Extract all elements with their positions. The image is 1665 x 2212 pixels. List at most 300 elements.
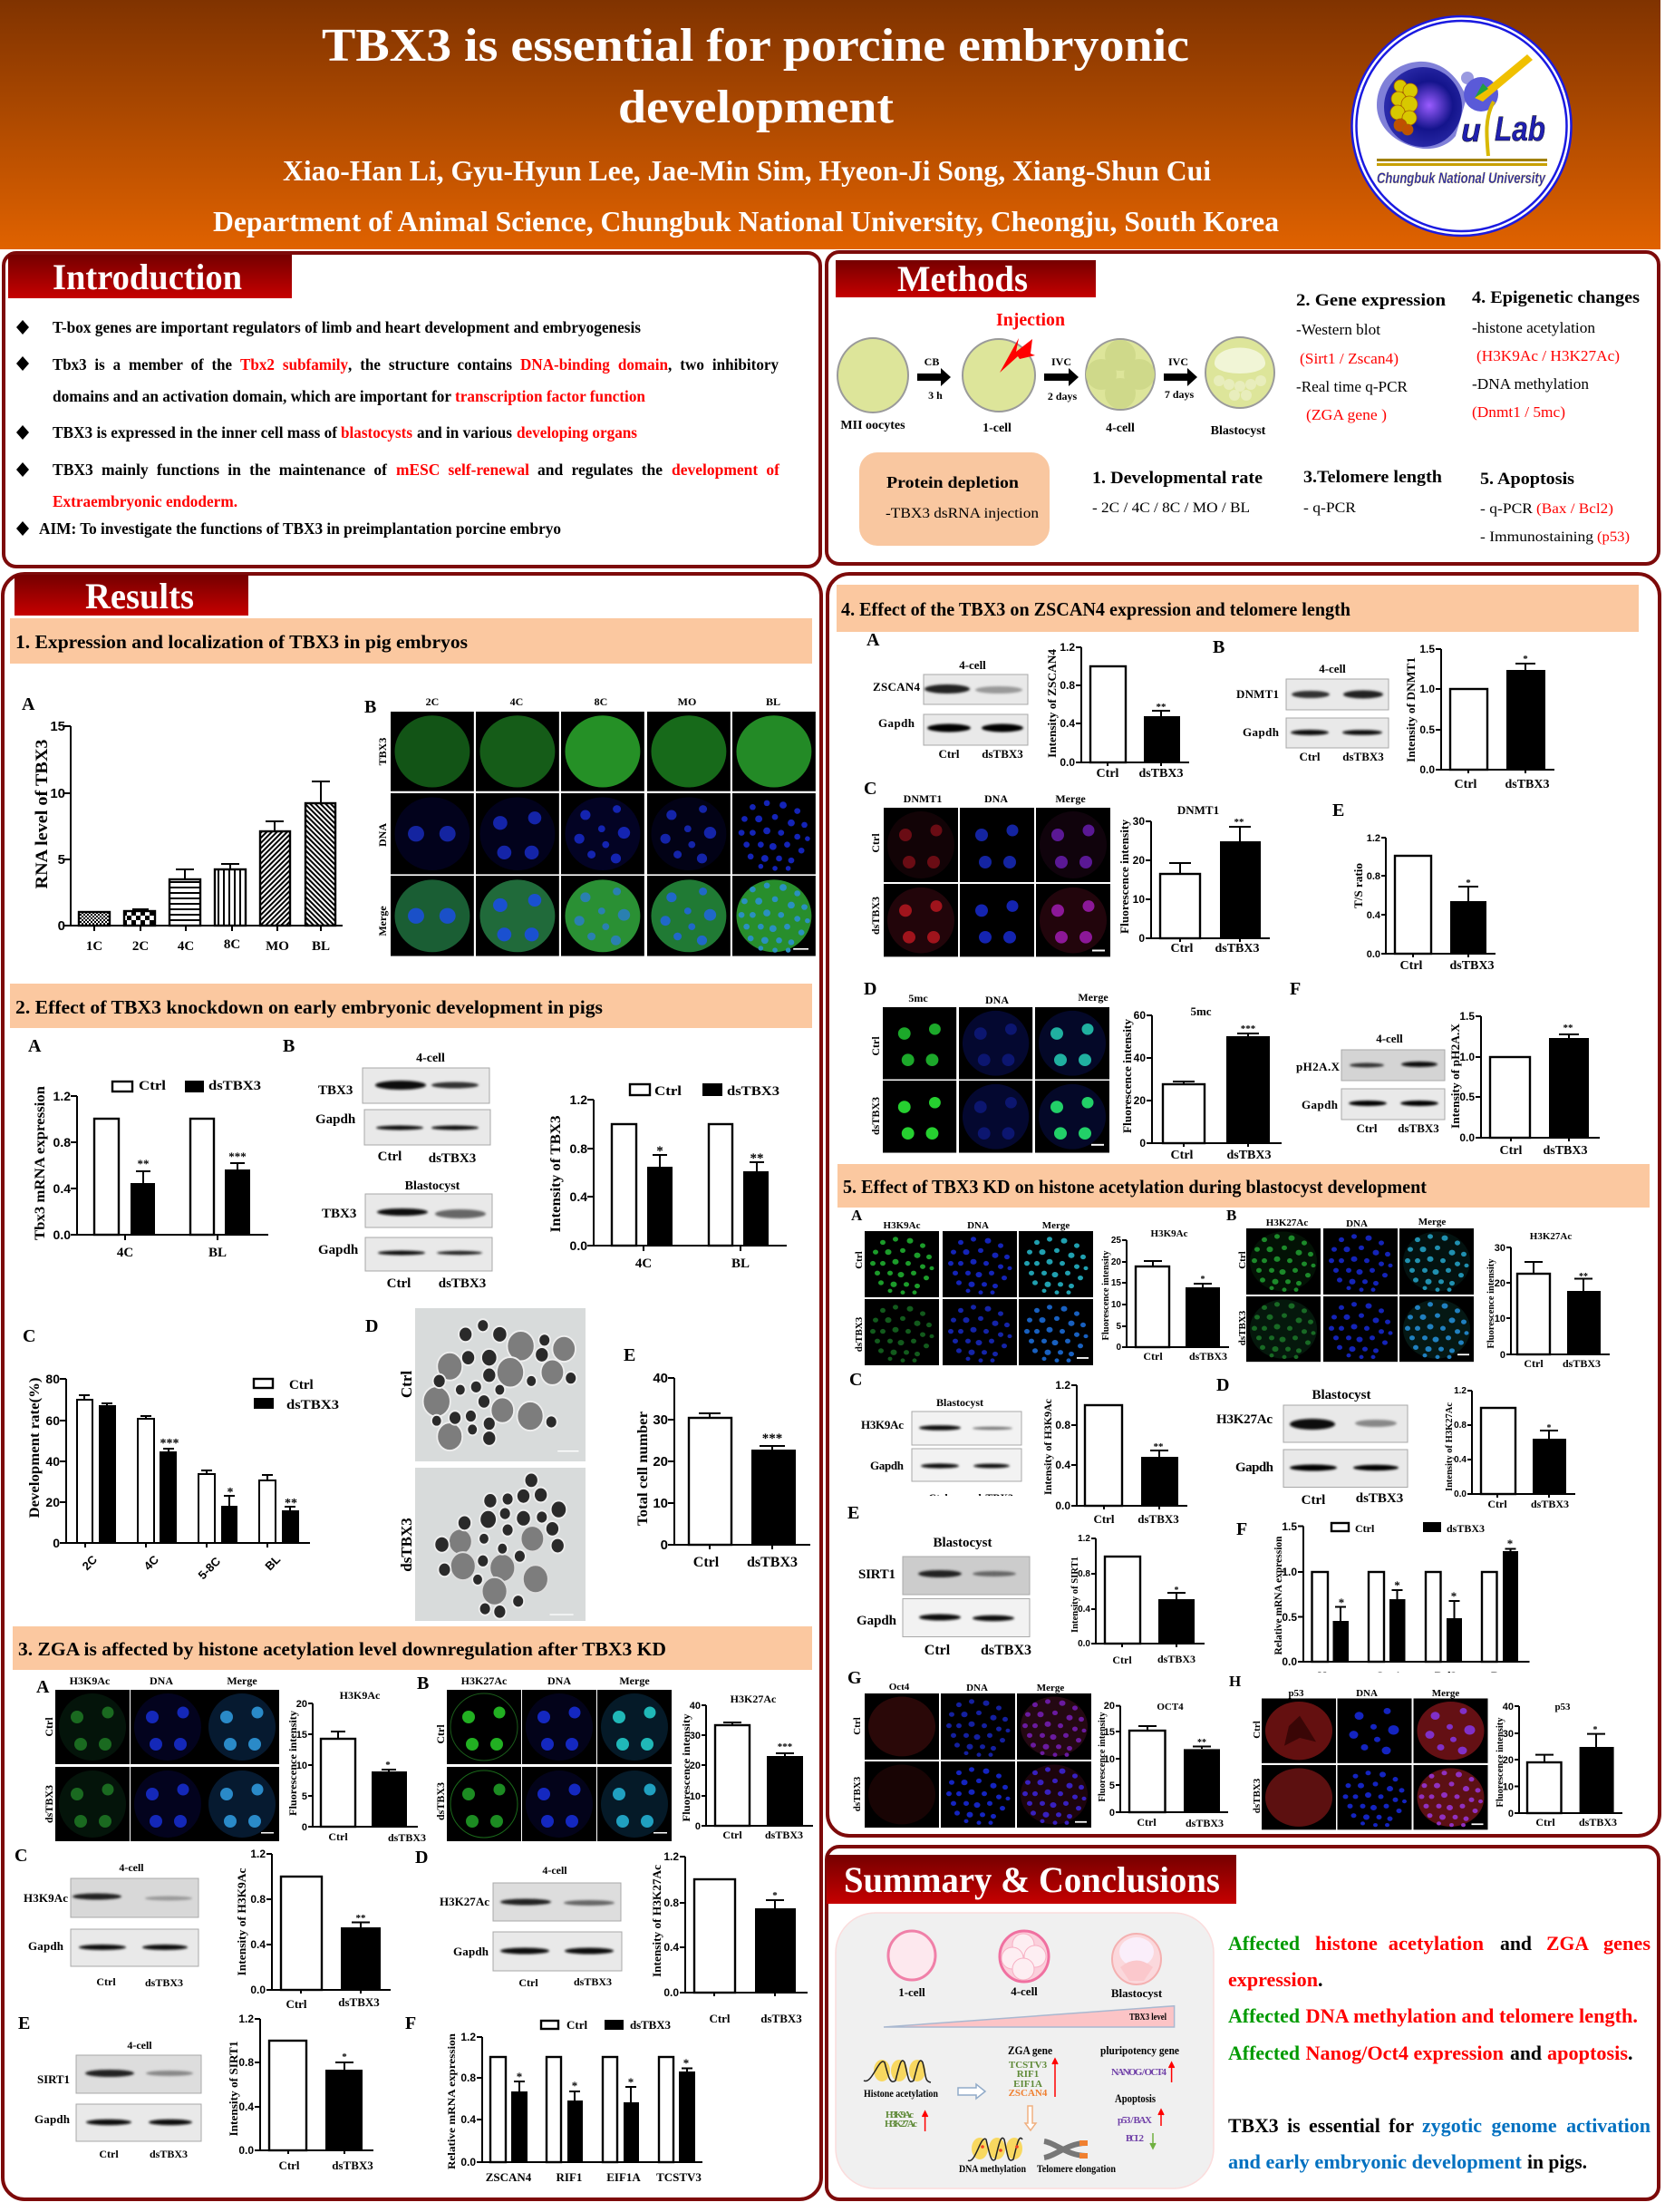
- bar chart 5B: 10: [1495, 1314, 1505, 1324]
- bar chart 4B: 0.5: [1419, 723, 1435, 736]
- bar chart 2C: development rate: BL: [262, 1552, 283, 1573]
- embryo culture diagram: Blastocyst: [1211, 424, 1266, 438]
- bar chart 2A: Tbx3 mRNA expression: A: [28, 1036, 42, 1056]
- bar chart 4C: DNMT1 fluorescence: 10: [1133, 893, 1145, 906]
- icon: DNA methylation nucleosomes: [968, 2138, 1022, 2161]
- micrograph panel 3B: H3K27Ac: H3K27Ac: [461, 1674, 508, 1687]
- text block: gene expression: (Sirt1 / Zscan4): [1300, 350, 1399, 367]
- text: histone acetylation: Histone acetylation: [864, 2087, 938, 2100]
- western blots 2B: Gapdh: [318, 1243, 359, 1257]
- western blot 5E: [847, 1503, 1031, 1658]
- bar chart 4F: 0.0: [1459, 1131, 1475, 1144]
- bar chart 3F: relative mRNA expression: Relative mRNA expression: [445, 2033, 458, 2169]
- micrograph panel 5G: Oct4: G: [847, 1668, 862, 1688]
- micrograph panel 4C: DNMT1: Ctrl: [869, 833, 882, 853]
- western blot 5D: dsTBX3: [1356, 1491, 1403, 1506]
- micrograph panel 4D: 5mc: DNA: [985, 994, 1009, 1006]
- micrograph grid 1B: TBX3 localisation: [364, 695, 816, 956]
- micrograph panel 3B: H3K27Ac: dsTBX3: [434, 1782, 447, 1820]
- bar chart 2A: Tbx3 mRNA expression: [28, 1036, 268, 1260]
- bar chart 3D: [650, 1850, 808, 2025]
- bullet list: development of: [672, 461, 780, 479]
- bar chart 2E: total cell number: 20: [653, 1454, 668, 1470]
- labels: DNA methylation and telomere: Telomere elongation: [1037, 2162, 1116, 2175]
- western blot 4F: 4-cell: [1376, 1032, 1403, 1045]
- bar chart 5D: Ctrl: [1487, 1498, 1507, 1510]
- micrograph panel 3A: H3K9Ac: DNA: [150, 1674, 173, 1687]
- bar chart 3F: relative mRNA expression: EIF1A: [606, 2170, 641, 2184]
- bar chart 3F: relative mRNA expression: dsTBX3: [630, 2018, 671, 2032]
- bar chart 2B: Intensity of TBX3: dsTBX3: [727, 1084, 779, 1099]
- bar chart 3D: dsTBX3: [760, 2012, 802, 2025]
- micrograph panel 4C: DNMT1: Merge: [1055, 792, 1086, 805]
- western blot 4A: Gapdh: [878, 716, 915, 730]
- bar chart 4F: [1448, 1010, 1600, 1158]
- bar chart 2C: development rate: 2C: [80, 1552, 100, 1573]
- embryo culture diagram: IVC: [1051, 355, 1071, 368]
- bar chart 2A: Tbx3 mRNA expression: Ctrl: [139, 1079, 166, 1093]
- bar chart 2B: Intensity of TBX3: 4C: [635, 1256, 652, 1271]
- bar chart 1A: RNA level of TBX3: [22, 694, 343, 954]
- bullet list: developing organs: [517, 423, 637, 441]
- micrograph panel 5H: p53: DNA: [1356, 1688, 1378, 1699]
- bar chart 5G: OCT4: Ctrl: [1137, 1816, 1157, 1829]
- bar chart 1A: RNA level of TBX3: A: [22, 694, 35, 714]
- bar chart 2C: development rate: 80: [45, 1372, 60, 1386]
- embryo photographs 2D: dsTBX3: [398, 1518, 415, 1572]
- bar chart 3C: 1.2: [250, 1848, 266, 1860]
- western blots 2B: 4-cell: [416, 1052, 445, 1065]
- western blots 2B: [283, 1036, 492, 1291]
- bar chart 3D: 1.2: [663, 1850, 679, 1863]
- western blot 3D: Gapdh: [453, 1945, 489, 1958]
- bar chart 4C: DNMT1 fluorescence: **: [1234, 817, 1244, 828]
- micrograph grid 1B: TBX3 localisation: B: [364, 697, 376, 717]
- western blot 5E: E: [847, 1503, 859, 1523]
- bar chart 2E: total cell number: 0: [661, 1538, 668, 1553]
- icon: telomere: [1044, 2140, 1088, 2159]
- bar chart 5B: 20: [1495, 1278, 1505, 1289]
- bar chart 1A: RNA level of TBX3: 4C: [178, 939, 194, 954]
- micrograph panel 5A: H3K9Ac: A: [851, 1207, 863, 1224]
- bar chart 5C: Ctrl: [1093, 1512, 1115, 1526]
- bar chart 5B: 30: [1495, 1243, 1505, 1254]
- bar chart 2C: development rate: 4C: [141, 1552, 161, 1573]
- bar chart 5F: relative mRNA expression: *: [1451, 1589, 1457, 1603]
- bar chart 4E: T/S ratio: 0.8: [1367, 871, 1380, 882]
- bar chart 5B: 0: [1500, 1350, 1505, 1361]
- title: [322, 20, 1189, 133]
- western blot 4F: Gapdh: [1302, 1098, 1339, 1111]
- bar chart 4E: T/S ratio: dsTBX3: [1449, 959, 1495, 973]
- western blot 4F: [1290, 979, 1445, 1135]
- western blot 5C: Gapdh: [870, 1459, 905, 1472]
- bar chart 5F: relative mRNA expression: Bax: [1491, 1669, 1511, 1683]
- western blots 2B: dsTBX3: [439, 1276, 486, 1291]
- bar chart 4D: 5mc fluorescence: [1120, 1004, 1282, 1162]
- western blot 4B: Ctrl: [1299, 750, 1321, 763]
- bar chart 5B: H3K27Ac: [1530, 1231, 1572, 1242]
- bar chart 4B: [1404, 643, 1554, 791]
- bar chart 4D: 5mc fluorescence: 0: [1139, 1137, 1146, 1150]
- embryo culture diagram: [837, 337, 1274, 438]
- ZGA gene list: RIF1: [1017, 2069, 1039, 2080]
- conclusions text: DNA methylation and telomere length.: [1305, 2004, 1638, 2027]
- micrograph panel 5B: H3K27Ac: Merge: [1418, 1217, 1446, 1227]
- bullet list: Extraembryonic endoderm.: [53, 492, 237, 510]
- bar chart 4E: T/S ratio: *: [1466, 878, 1471, 888]
- bar chart 1A: RNA level of TBX3: 0: [58, 918, 65, 934]
- bar chart 2C: development rate: ***: [160, 1437, 179, 1450]
- section heading 2: [10, 984, 812, 1028]
- micrograph panel 5B: H3K27Ac: dsTBX3: [1237, 1310, 1248, 1345]
- text: histone marks: [885, 2110, 917, 2130]
- apoptosis block: BCL2: [1126, 2133, 1144, 2144]
- western blots 2B: B: [283, 1036, 295, 1056]
- bar chart 4D: 5mc fluorescence: Ctrl: [1171, 1149, 1194, 1162]
- micrograph panel 5B: H3K27Ac: DNA: [1346, 1218, 1368, 1229]
- text block: apoptosis: [1480, 470, 1630, 545]
- micrograph panel 4C: DNMT1: DNA: [984, 792, 1008, 805]
- bar chart 5F: relative mRNA expression: [1236, 1519, 1532, 1683]
- western blot 4B: B: [1213, 637, 1225, 657]
- heading: Summary & Conclusions: Summary & Conclusions: [844, 1859, 1220, 1900]
- bar chart 4E: T/S ratio: Ctrl: [1400, 959, 1423, 973]
- western blot 5D: [1216, 1375, 1408, 1508]
- bar chart 4B: dsTBX3: [1505, 778, 1550, 791]
- bar chart 2E: total cell number: Total cell number: [635, 1412, 651, 1526]
- micrograph panel 5A: H3K9Ac: [851, 1207, 1093, 1365]
- callout: protein depletion: -TBX3 dsRNA injection: [886, 506, 1039, 521]
- micrograph panel 5G: Oct4: Oct4: [889, 1682, 910, 1693]
- bar chart 3D: *: [772, 1890, 778, 1901]
- western blots 2B: dsTBX3: [429, 1151, 476, 1166]
- bar chart 5A: *: [1200, 1275, 1205, 1285]
- bar chart 4A: **: [1157, 702, 1166, 713]
- bar chart 5H: p53: Fluorescence intensity: [1495, 1717, 1505, 1808]
- conclusions text: Nanog/Oct4 expression: [1305, 2042, 1504, 2064]
- icon: 4-cell embryo: [1000, 1931, 1049, 1982]
- western blot 4B: [1213, 637, 1389, 763]
- bar chart 3B: H3K27Ac fluorescence: 40: [690, 1701, 701, 1712]
- micrograph panel 5A: H3K9Ac: DNA: [967, 1220, 989, 1231]
- apoptosis block: [1115, 2091, 1164, 2149]
- micrograph panel 4D: 5mc: 5mc: [908, 992, 928, 1004]
- micrograph panel 3A: H3K9Ac: dsTBX3: [43, 1785, 55, 1823]
- bar chart 2C: development rate: 5-8C: [196, 1554, 224, 1582]
- bar chart 3B: H3K27Ac fluorescence: H3K27Ac: [731, 1693, 777, 1705]
- bar chart 5C: **: [1153, 1441, 1164, 1452]
- bar chart 5F: relative mRNA expression: F: [1236, 1519, 1247, 1539]
- bar chart 2E: total cell number: dsTBX3: [747, 1555, 798, 1570]
- bar chart 1A: RNA level of TBX3: 15: [50, 719, 65, 734]
- micrograph grid 1B: TBX3 localisation: Merge: [376, 906, 389, 936]
- western blot 3C: Ctrl: [96, 1975, 116, 1988]
- bar chart 5F: relative mRNA expression: *: [1507, 1537, 1513, 1550]
- bullet list: mESC self-renewal: [396, 461, 529, 479]
- western blot 3C: Gapdh: [28, 1939, 64, 1953]
- western blot 3E: Gapdh: [34, 2112, 71, 2126]
- bar chart 5H: p53: 20: [1503, 1755, 1514, 1766]
- text block: epigenetic changes: -histone acetylation: [1472, 319, 1596, 336]
- bar chart 5G: OCT4: **: [1197, 1738, 1206, 1748]
- header banner: [0, 0, 1660, 249]
- section heading 3: 3. ZGA is affected by histone acetylation level downregulation after TBX3 KD: [18, 1638, 666, 1660]
- conclusions text: Affected: [1228, 1932, 1300, 1955]
- micrograph panel 3B: H3K27Ac: Ctrl: [434, 1724, 447, 1744]
- conclusions text: histone acetylation: [1315, 1932, 1484, 1955]
- bar chart 5D: 0.4: [1454, 1455, 1467, 1465]
- bar chart 2A: Tbx3 mRNA expression: Tbx3 mRNA expression: [33, 1086, 48, 1240]
- embryo photographs 2D: [365, 1308, 586, 1621]
- bar chart 5D: dsTBX3: [1531, 1498, 1569, 1510]
- text block: gene expression: -Real time q-PCR: [1296, 378, 1408, 395]
- bar chart 3C: [235, 1848, 391, 2011]
- bar chart 2C: development rate: 60: [45, 1413, 60, 1428]
- bar chart 5F: relative mRNA expression: 1.5: [1282, 1520, 1297, 1533]
- western blot 3C: [15, 1846, 198, 1989]
- bar chart 5A: dsTBX3: [1189, 1350, 1227, 1363]
- bar chart 3F: relative mRNA expression: 0.4: [460, 2113, 476, 2126]
- bar chart 3E: Intensity of SIRT1: [227, 2042, 240, 2136]
- bar chart 3E: 0.0: [238, 2144, 254, 2157]
- bar chart 5B: dsTBX3: [1563, 1357, 1601, 1370]
- bar chart 4A: 0.8: [1060, 679, 1075, 692]
- micrograph grid 1B: TBX3 localisation: BL: [766, 695, 780, 708]
- text block: gene expression: [1296, 291, 1446, 423]
- western blot 3E: Ctrl: [99, 2148, 119, 2160]
- bar chart 3B: H3K27Ac fluorescence: 30: [690, 1731, 701, 1741]
- text block: gene expression: (ZGA gene ): [1306, 406, 1387, 423]
- icon: Cui Lab logo: [1352, 16, 1572, 236]
- micrograph panel 5G: Oct4: [847, 1668, 1091, 1828]
- bar chart 2A: Tbx3 mRNA expression: 0.4: [53, 1181, 71, 1196]
- western blot 5D: Ctrl: [1302, 1493, 1325, 1508]
- bar chart 5A: 15: [1111, 1278, 1121, 1288]
- ZGA gene list: EIF1A: [1013, 2079, 1042, 2090]
- embryo culture diagram: 1-cell: [983, 422, 1012, 435]
- bar chart 2C: development rate: 20: [45, 1495, 60, 1509]
- micrograph panel 5B: H3K27Ac: B: [1226, 1207, 1236, 1224]
- panel: results left: [3, 574, 821, 2199]
- bar chart 5A: 10: [1111, 1300, 1121, 1310]
- panel: summary and conclusions: [827, 1847, 1659, 2199]
- ZGA gene list: [1008, 2043, 1058, 2099]
- western blot 5D: Blastocyst: [1312, 1388, 1370, 1402]
- text block: epigenetic changes: 4. Epigenetic changes: [1472, 288, 1640, 307]
- affiliation: Department of Animal Science, Chungbuk National University, Cheongju, South Korea: [213, 205, 1279, 238]
- bar chart 4E: T/S ratio: 1.2: [1367, 833, 1380, 844]
- western blot 4B: 4-cell: [1319, 662, 1346, 675]
- arrow: up red: [923, 2111, 928, 2131]
- text block: epigenetic changes: -DNA methylation: [1472, 375, 1590, 393]
- bar chart 5C: 0.0: [1055, 1499, 1070, 1512]
- micrograph panel 5G: Oct4: DNA: [966, 1683, 988, 1693]
- micrograph grid 1B: TBX3 localisation: 2C: [426, 695, 439, 708]
- bar chart 3F: relative mRNA expression: *: [628, 2075, 634, 2089]
- micrograph grid 1B: TBX3 localisation: MO: [678, 695, 696, 708]
- authors: Xiao-Han Li, Gyu-Hyun Lee, Jae-Min Sim, Hyeon-Ji Song, Xiang-Shun Cui: [283, 154, 1211, 187]
- embryo culture diagram: 2 days: [1048, 390, 1078, 403]
- western blot 5E: Ctrl: [924, 1643, 951, 1658]
- bar chart 3D: Ctrl: [709, 2012, 731, 2025]
- bar chart 2E: total cell number: 30: [653, 1412, 668, 1428]
- bullet list: [16, 318, 780, 538]
- bar chart 5E: dsTBX3: [1157, 1653, 1196, 1665]
- bar chart 5G: OCT4: Fluorescence intensity: [1097, 1712, 1108, 1802]
- bar chart 5H: p53: 40: [1503, 1702, 1514, 1712]
- micrograph panel 4D: 5mc: dsTBX3: [869, 1097, 882, 1135]
- bar chart 5F: relative mRNA expression: Oct4: [1376, 1669, 1400, 1683]
- bar chart 3C: 0.8: [250, 1893, 266, 1906]
- micrograph panel 3A: H3K9Ac: Ctrl: [43, 1717, 55, 1737]
- conclusions text: ZGA: [1546, 1932, 1589, 1955]
- bar chart 4E: T/S ratio: 0.0: [1367, 949, 1380, 960]
- text: histone marks: H3K27Ac: [885, 2119, 917, 2130]
- micrograph panel 4D: 5mc: Ctrl: [869, 1036, 882, 1056]
- western blots 2B: Gapdh: [315, 1112, 356, 1127]
- western blot 5D: D: [1216, 1375, 1229, 1395]
- micrograph panel 3A: H3K9Ac: H3K9Ac: [70, 1674, 111, 1687]
- bar chart 1A: RNA level of TBX3: 1C: [86, 939, 102, 954]
- bar chart 2B: Intensity of TBX3: [548, 1083, 787, 1271]
- embryo culture diagram: CB: [924, 355, 939, 368]
- bar chart 3E: [227, 2013, 373, 2172]
- bar chart 3B: H3K27Ac fluorescence: Fluorescence intensity: [680, 1713, 692, 1822]
- bar chart 5B: Fluorescence intensity: [1486, 1258, 1496, 1349]
- micrograph grid 1B: TBX3 localisation: DNA: [376, 823, 389, 847]
- bar chart 5A: 25: [1111, 1236, 1121, 1246]
- western blot 5E: dsTBX3: [981, 1643, 1031, 1658]
- bar chart 5A: Fluorescence intensity: [1100, 1250, 1111, 1340]
- western blot 4F: F: [1290, 979, 1301, 999]
- callout: protein depletion: Protein depletion: [886, 473, 1019, 491]
- text block: apoptosis: - q-PCR: [1480, 501, 1533, 517]
- text block: developmental rate: [1092, 469, 1263, 516]
- western blot 5C: dsTBX3: [975, 1491, 1013, 1504]
- bar chart 5E: [1070, 1534, 1205, 1666]
- bar chart 5E: 0.0: [1078, 1639, 1090, 1649]
- bullet list: DNA-binding domain: [520, 355, 668, 374]
- section heading 5: [837, 1164, 1650, 1208]
- pluripotency block: NANOG / OCT4: [1111, 2067, 1167, 2078]
- bullet list: , the structure contains: [348, 355, 512, 374]
- bar chart 2E: total cell number: [624, 1345, 810, 1570]
- bar chart 5D: 0.0: [1454, 1489, 1467, 1499]
- bar chart 5A: H3K9Ac: [1151, 1228, 1188, 1239]
- western blot 3D: dsTBX3: [574, 1975, 612, 1988]
- pluripotency block: [1100, 2043, 1179, 2082]
- apoptosis block: Apoptosis: [1115, 2091, 1156, 2105]
- micrograph panel 5A: H3K9Ac: H3K9Ac: [884, 1220, 921, 1231]
- western blot 3E: dsTBX3: [150, 2148, 188, 2160]
- conclusions text: TBX3 is essential for: [1228, 2114, 1414, 2137]
- bar chart 3E: dsTBX3: [332, 2159, 373, 2172]
- western blot 4F: pH2A.X: [1296, 1060, 1341, 1073]
- bar chart 3B: H3K27Ac fluorescence: Ctrl: [722, 1829, 742, 1841]
- conclusions text: and early embryonic development: [1228, 2150, 1523, 2173]
- western blot 4A: dsTBX3: [982, 747, 1023, 761]
- icon: Cui Lab logo: u: [1461, 112, 1481, 149]
- bar chart 2B: Intensity of TBX3: **: [750, 1151, 763, 1166]
- bar chart 3A: H3K9Ac fluorescence: 0: [302, 1822, 307, 1833]
- bar chart 2B: Intensity of TBX3: Ctrl: [654, 1084, 682, 1099]
- bullet list: and regulates the: [537, 461, 663, 479]
- heading: Introduction: [8, 255, 292, 298]
- micrograph panel 5H: p53: dsTBX3: [1252, 1778, 1263, 1813]
- text block: gene expression: -Western blot: [1296, 321, 1380, 338]
- bar chart 1A: RNA level of TBX3: 10: [50, 786, 65, 801]
- micrograph panel 4D: 5mc: [864, 979, 1109, 1153]
- bar chart 2B: Intensity of TBX3: BL: [731, 1256, 750, 1271]
- apoptosis block: p53 / BAX: [1118, 2115, 1152, 2126]
- western blots 2B: TBX3: [322, 1207, 356, 1221]
- bar chart 4F: 1.0: [1459, 1051, 1475, 1063]
- text block: developmental rate: 1. Developmental rate: [1092, 469, 1263, 488]
- western blot 5C: Ctrl: [928, 1491, 948, 1504]
- heading: Introduction: Introduction: [53, 257, 242, 297]
- bar chart 4F: 0.5: [1459, 1091, 1475, 1103]
- bar chart 5F: relative mRNA expression: *: [1339, 1596, 1344, 1609]
- bar chart 5F: relative mRNA expression: Bcl2: [1435, 1669, 1457, 1683]
- bar chart 1A: RNA level of TBX3: 8C: [224, 937, 240, 952]
- micrograph grid 1B: TBX3 localisation: 4C: [510, 695, 523, 708]
- western blot 5C: H3K9Ac: [861, 1418, 904, 1431]
- bar chart 1A: RNA level of TBX3: RNA level of TBX3: [33, 740, 52, 888]
- micrograph panel 3B: H3K27Ac: DNA: [547, 1674, 571, 1687]
- stage labels: 4-cell: [1011, 1984, 1038, 1998]
- embryo culture diagram: MII oocytes: [840, 419, 905, 432]
- bar chart 2B: Intensity of TBX3: 0.8: [570, 1141, 587, 1156]
- bar chart 2C: development rate: C: [23, 1326, 35, 1346]
- bar chart 4C: DNMT1 fluorescence: 0: [1138, 932, 1145, 945]
- bar chart 1A: RNA level of TBX3: 5: [58, 852, 65, 868]
- bar chart 5A: [1100, 1228, 1229, 1363]
- bullet list: , two inhibitory: [668, 355, 779, 374]
- bullet list: domains and an activation domain, which are important for: [53, 387, 451, 405]
- bar chart 5H: p53: dsTBX3: [1579, 1816, 1617, 1829]
- bar chart 5G: OCT4: OCT4: [1157, 1702, 1184, 1712]
- panel: introduction: [4, 253, 820, 567]
- bar chart 4C: DNMT1 fluorescence: [1118, 803, 1270, 956]
- bar chart 3C: **: [355, 1913, 366, 1924]
- text block: gene expression: 2. Gene expression: [1296, 291, 1446, 310]
- bar chart 4C: DNMT1 fluorescence: Fluorescence intensity: [1118, 820, 1131, 934]
- bullet list: AIM: To investigate the functions of TBX3 in preimplantation porcine embryo: [39, 519, 561, 538]
- stage labels: [898, 1984, 1163, 2000]
- bar chart 5C: 0.4: [1055, 1459, 1070, 1471]
- ZGA gene list: TCSTV3: [1009, 2060, 1048, 2071]
- bar chart 3F: relative mRNA expression: *: [683, 2056, 689, 2070]
- text block: telomere length: 3.Telomere length: [1303, 468, 1442, 487]
- bar chart 3A: H3K9Ac fluorescence: 5: [302, 1791, 307, 1802]
- bar chart 3F: relative mRNA expression: 0.0: [460, 2156, 476, 2168]
- bar chart 5D: [1444, 1386, 1575, 1510]
- bar chart 5F: relative mRNA expression: Relative mRNA expression: [1272, 1536, 1284, 1655]
- bar chart 3F: relative mRNA expression: *: [517, 2070, 522, 2083]
- bar chart 5F: relative mRNA expression: 0.5: [1282, 1611, 1297, 1624]
- bar chart 5E: *: [1175, 1586, 1178, 1596]
- section heading 4: [837, 585, 1639, 632]
- bar chart 3F: relative mRNA expression: [405, 2013, 702, 2184]
- western blots 2B: Ctrl: [378, 1150, 402, 1164]
- western blot 5C: [849, 1370, 1024, 1505]
- micrograph grid 1B: TBX3 localisation: TBX3: [376, 738, 389, 765]
- bar chart 3A: H3K9Ac fluorescence: Ctrl: [328, 1830, 348, 1843]
- micrograph panel 5A: H3K9Ac: dsTBX3: [854, 1316, 865, 1352]
- bar chart 2C: development rate: 0: [53, 1536, 60, 1550]
- bar chart 3A: H3K9Ac fluorescence: 15: [296, 1730, 307, 1741]
